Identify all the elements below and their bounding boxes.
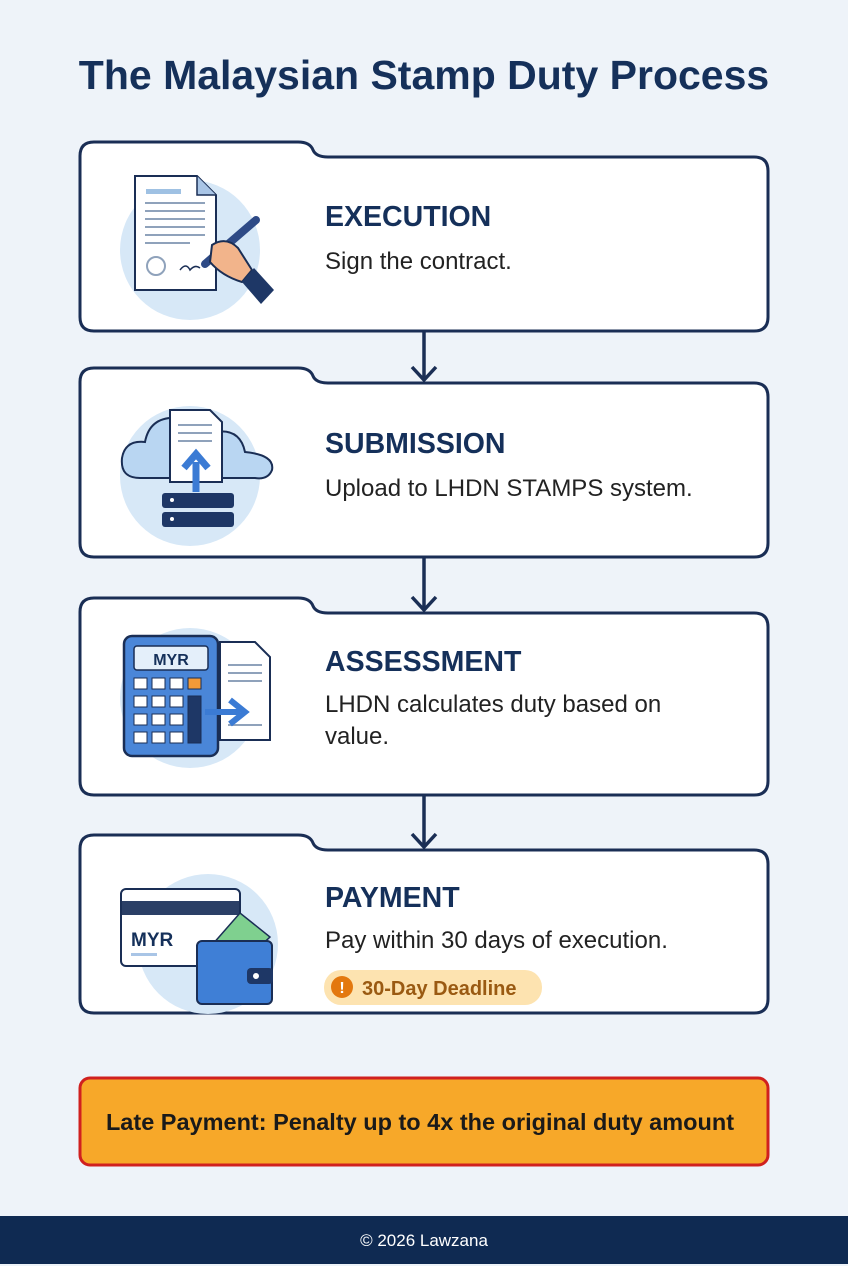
step 3 text: ASSESSMENT [325, 646, 521, 678]
icon: card and wallet [121, 874, 278, 1014]
icon: calculator [120, 628, 270, 768]
footer: © 2026 Lawzana [360, 1231, 488, 1250]
icon: card and wallet: MYR [131, 930, 174, 951]
arrow 3 [412, 796, 436, 847]
arrow 2 [412, 558, 436, 610]
card: payment [80, 835, 768, 1013]
icon: cloud upload [120, 406, 272, 546]
text: Sign the contract. [325, 248, 512, 275]
callout badge: 30-Day Deadline [362, 978, 517, 1000]
step 4 text: PAYMENT [325, 882, 460, 914]
icon: document signing [120, 176, 274, 320]
card: assessment [80, 598, 768, 795]
text: Pay within 30 days of execution. [325, 927, 668, 954]
card: submission [80, 368, 768, 557]
warning banner: Late Payment: Penalty up to 4x the original duty amount [106, 1109, 734, 1135]
arrow 1 [412, 332, 436, 380]
callout badge [324, 970, 542, 1005]
text: LHDN calculates duty based on value. [325, 691, 661, 750]
card: execution [80, 142, 768, 331]
step 2 text: SUBMISSION [325, 428, 506, 460]
icon: calculator: MYR [153, 652, 189, 669]
text: Upload to LHDN STAMPS system. [325, 475, 693, 502]
warning banner [80, 1078, 768, 1165]
step 1 text: EXECUTION [325, 201, 491, 233]
footer [0, 1216, 848, 1264]
title: The Malaysian Stamp Duty Process [79, 52, 769, 98]
callout badge: ! [339, 980, 345, 997]
